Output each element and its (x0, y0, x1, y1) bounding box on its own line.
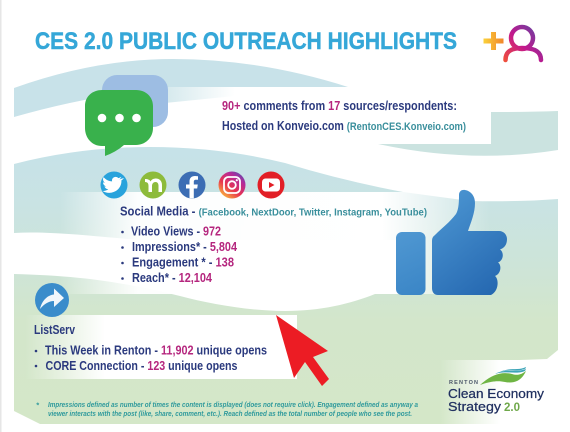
list: social media metrics (121, 224, 238, 285)
background panel: logo (440, 360, 522, 425)
background wave: white sweep (14, 233, 400, 311)
list: ListServ metrics (35, 342, 267, 373)
text: comments: 90+ comments from 17 sources/respondents: (222, 99, 457, 113)
icon: red cursor arrow (276, 315, 329, 386)
icon: Twitter (100, 172, 128, 198)
title: CES 2.0 PUBLIC OUTREACH HIGHLIGHTS (35, 28, 457, 55)
list: social media metrics: Impressions* - 5,804 (132, 239, 238, 254)
page edge (0, 0, 2, 432)
list: social media metrics: Reach* - 12,104 (132, 270, 213, 285)
logo: Renton Clean Economy Strategy 2.0: Strategy (448, 399, 502, 414)
text: ListServ heading: ListServ (34, 322, 76, 337)
icon: Facebook (178, 172, 206, 198)
icon: share arrow (35, 283, 69, 317)
list: social media metrics: Video Views - 972 (131, 224, 221, 238)
background wave: top band fade (165, 87, 235, 103)
social media icons (100, 172, 284, 198)
background shape: lower panel (14, 147, 558, 424)
text: social media heading: Social Media - (Facebook, NextDoor, Twitter, Instagram, YouTube) (120, 204, 427, 218)
footnote: Impressions defined as number of times the content is displayed (does not require click). Engagement defined as anyway a (48, 400, 418, 409)
list: ListServ metrics: This Week in Renton - 11,902 unique opens (45, 342, 267, 358)
logo: Renton Clean Economy Strategy 2.0 (448, 367, 545, 414)
footnote (36, 400, 418, 418)
text: hosted on Konveio: Hosted on Konveio.com (RentonCES.Konveio.com) (222, 119, 466, 133)
icon: chat bubbles (85, 75, 168, 156)
logo: Renton Clean Economy Strategy 2.0: RENTON (449, 380, 478, 386)
list: ListServ metrics: CORE Connection - 123 unique opens (46, 358, 238, 373)
logo: Renton Clean Economy Strategy 2.0: 2.0 (504, 400, 520, 414)
footnote: viewer interacts with the post (like, share, comment, etc.). Reach defined as the total number of people who see the post. (48, 409, 412, 418)
icon: add user (484, 27, 541, 60)
list: social media metrics: Engagement * - 138 (132, 254, 234, 270)
background wave: top band (14, 59, 348, 117)
background wave: right band (378, 111, 558, 156)
background panel: listserv (25, 315, 297, 379)
icon: Instagram (218, 172, 246, 198)
footnote: * (36, 400, 40, 410)
icon: thumbs up (396, 190, 507, 295)
icon: Nextdoor (140, 172, 166, 198)
background panel: social media (60, 192, 490, 294)
logo: Renton Clean Economy Strategy 2.0: Clean Economy (448, 386, 545, 401)
icon: YouTube (258, 172, 284, 198)
